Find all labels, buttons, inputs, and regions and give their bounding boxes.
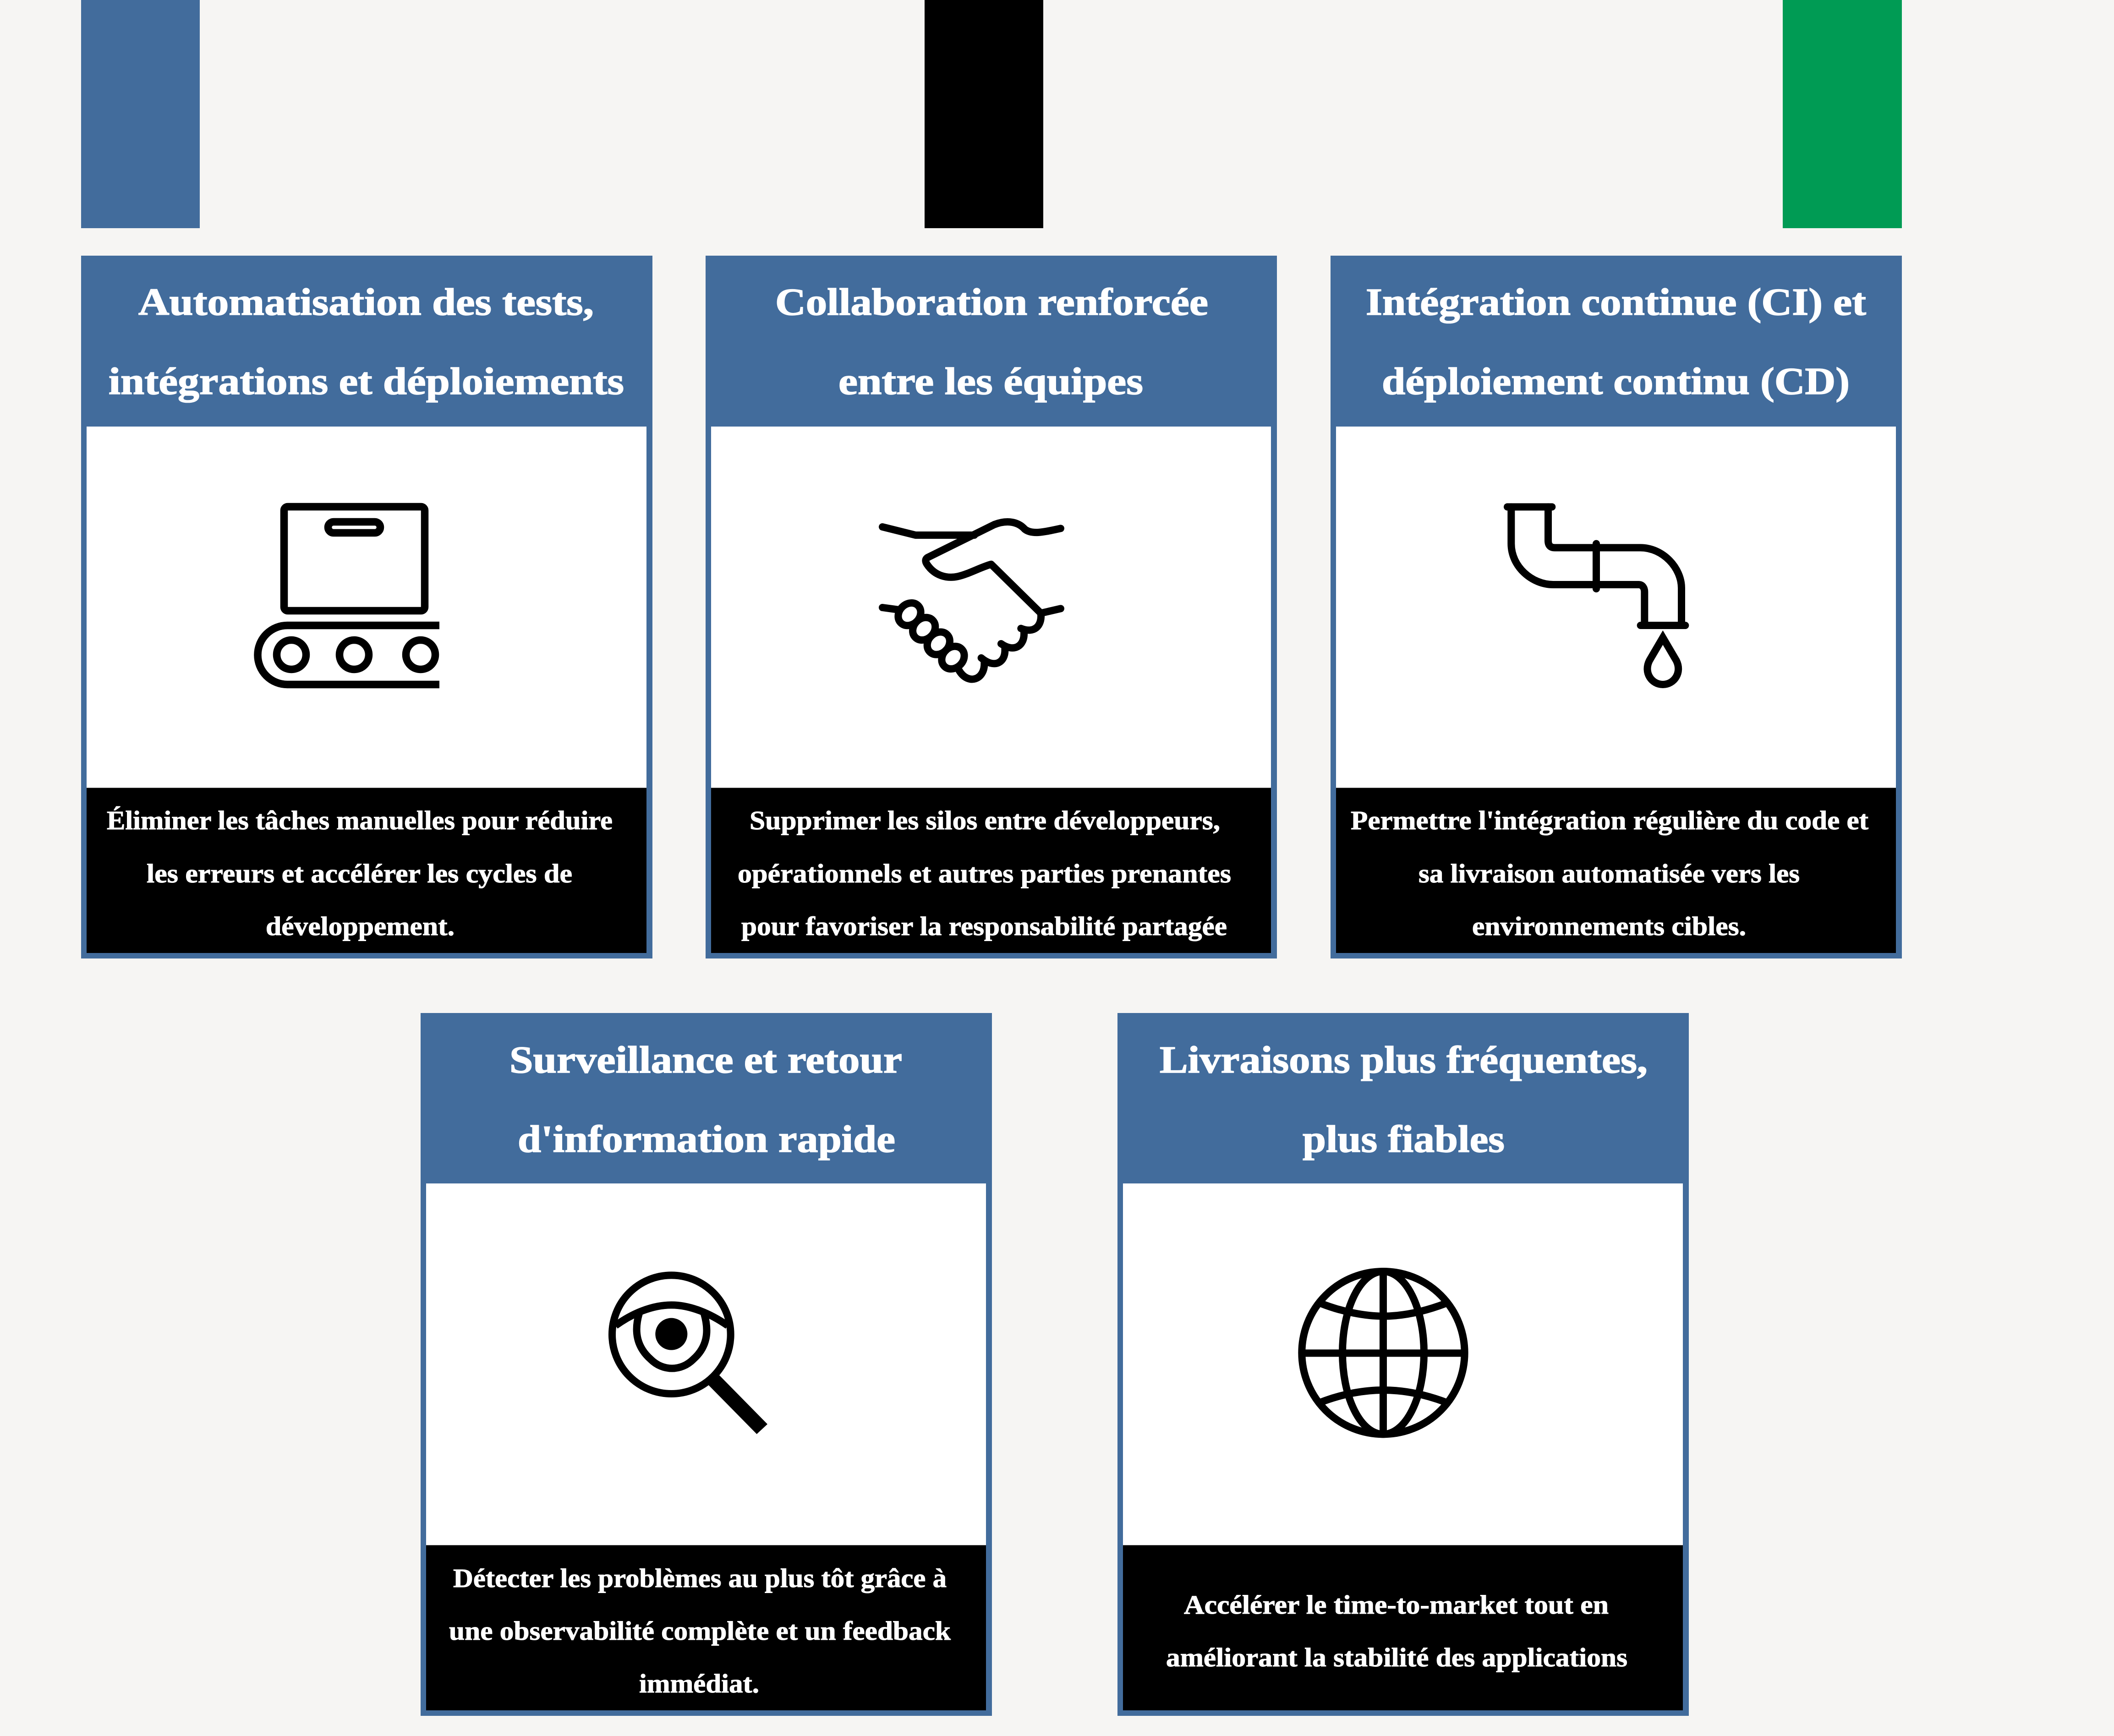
description: Supprimer les silos entre développeurs,: [750, 805, 1220, 835]
icon area: [1336, 427, 1896, 788]
heading: déploiement continu (CD): [1382, 360, 1850, 403]
heading: intégrations et déploiements: [109, 360, 624, 403]
heading: Collaboration renforcée: [775, 281, 1208, 323]
panel: Surveillance et retour: [421, 1013, 992, 1716]
description: [449, 1563, 951, 1698]
description: Détecter les problèmes au plus tôt grâce à: [453, 1563, 947, 1593]
heading: [1160, 1039, 1648, 1161]
description: [1166, 1590, 1627, 1672]
panel: Intégration continue: [1331, 256, 1902, 958]
description: une observabilité complète et un feedback: [449, 1616, 951, 1646]
card frame and header band: [706, 256, 1277, 958]
text area: [711, 788, 1271, 953]
text area: [426, 1545, 986, 1710]
description: environnements cibles.: [1472, 911, 1746, 941]
description: Permettre l'intégration régulière du code et: [1351, 805, 1869, 835]
description: [107, 805, 613, 941]
heading: [509, 1039, 902, 1161]
heading: Automatisation des tests,: [138, 281, 594, 323]
description: pour favoriser la responsabilité partagée: [741, 911, 1227, 941]
description: améliorant la stabilité des applications: [1166, 1643, 1627, 1672]
heading: Intégration continue (CI) et: [1366, 281, 1866, 323]
icon area: [711, 427, 1271, 788]
heading: [109, 281, 624, 403]
card frame and header band: [1117, 1013, 1689, 1716]
panel: Automatisation des tests: [81, 256, 652, 958]
icon: conveyor belt: [257, 507, 439, 685]
description: Accélérer le time-to-market tout en: [1184, 1590, 1609, 1620]
description: développement.: [266, 911, 455, 941]
heading: Livraisons plus fréquentes,: [1160, 1039, 1648, 1081]
heading: plus fiables: [1303, 1118, 1505, 1161]
icon area: [426, 1183, 986, 1545]
heading: d'information rapide: [518, 1118, 895, 1161]
description: [1351, 805, 1869, 941]
panel: Collaboration renforcée: [706, 256, 1277, 958]
description: les erreurs et accélérer les cycles de: [147, 859, 572, 888]
text area: [87, 788, 646, 953]
card frame and header band: [81, 256, 652, 958]
icon: handshake: [882, 522, 1061, 679]
text area: [1123, 1545, 1683, 1710]
black top bar: [925, 0, 1043, 228]
icon area: [87, 427, 646, 788]
text area: [1336, 788, 1896, 953]
icon: globe: [1302, 1271, 1465, 1434]
description: immédiat.: [639, 1669, 759, 1698]
description: opérationnels et autres parties prenantes: [738, 859, 1231, 888]
panel: Livraisons plus fréquentes: [1117, 1013, 1689, 1716]
icon: eye in magnifying glass: [612, 1275, 767, 1434]
description: [738, 805, 1231, 941]
description: sa livraison automatisée vers les: [1418, 859, 1800, 888]
card frame and header band: [421, 1013, 992, 1716]
heading: entre les équipes: [838, 360, 1143, 403]
heading: [1366, 281, 1866, 403]
blue top bar: [81, 0, 200, 228]
heading: Surveillance et retour: [509, 1039, 902, 1081]
card frame and header band: [1331, 256, 1902, 958]
icon: dripping pipe: [1507, 507, 1685, 685]
green top bar: [1783, 0, 1902, 228]
description: Éliminer les tâches manuelles pour réduire: [107, 805, 613, 835]
heading: [775, 281, 1208, 403]
icon area: [1123, 1183, 1683, 1545]
